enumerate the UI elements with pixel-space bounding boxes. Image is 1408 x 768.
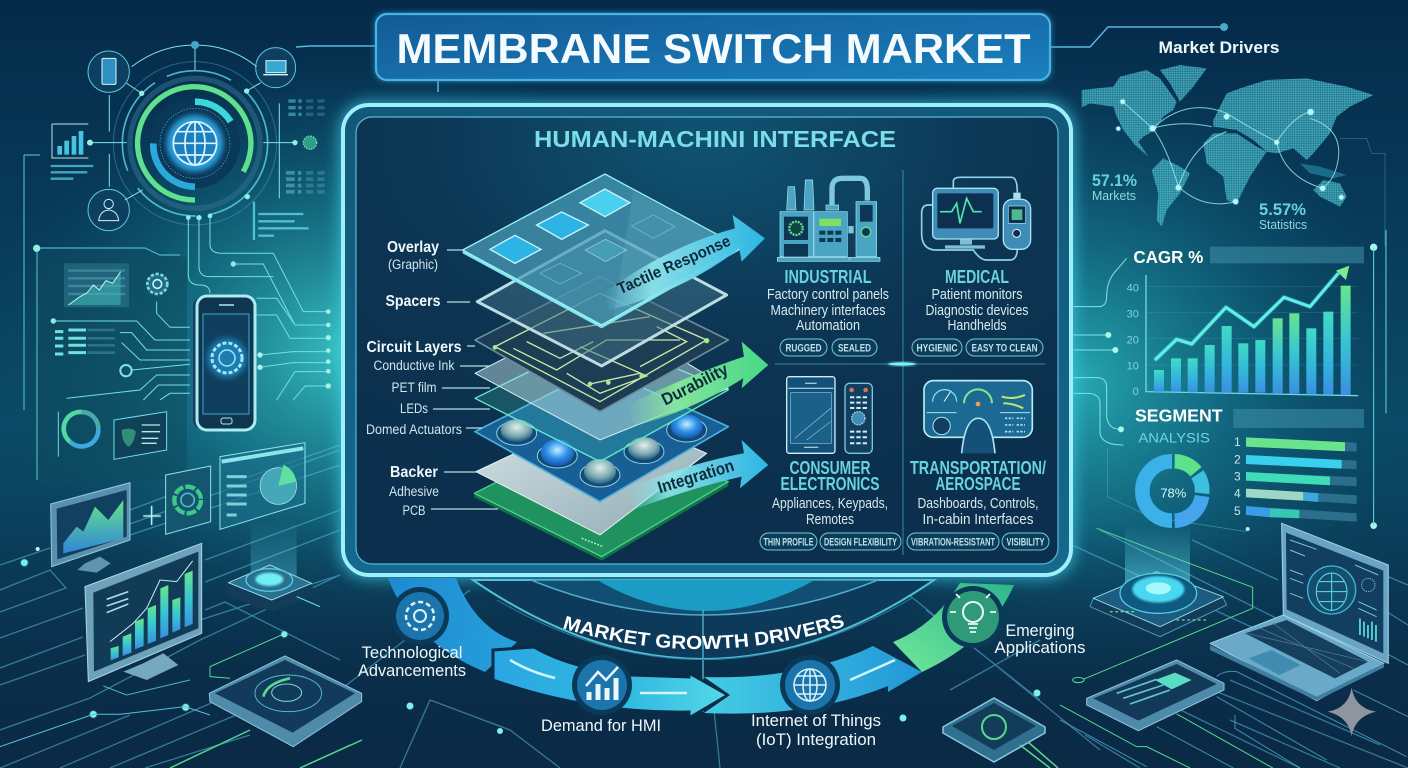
text: internet of things: Internet of Things — [751, 711, 881, 730]
icon: factory — [777, 178, 880, 261]
bar and line chart: 30 — [1127, 308, 1139, 320]
segment bars: 3 — [1234, 470, 1241, 484]
arrow band: IoT — [704, 646, 922, 714]
text: emerging applications — [994, 621, 1086, 657]
layer labels: PCB — [402, 503, 426, 518]
arrow band: technological advancements — [388, 578, 517, 672]
bar and line chart: 10 — [1127, 360, 1139, 372]
chips: industrial — [780, 339, 877, 356]
chips: industrial: RUGGED — [786, 342, 822, 354]
LED film layer — [475, 337, 728, 462]
layer labels: Backer — [390, 464, 438, 481]
text: transportation uses: Dashboards, Controls, — [918, 496, 1038, 512]
icon: trend chart — [572, 655, 632, 715]
monitor 2 — [85, 543, 202, 682]
text: consumer uses: Appliances, Keypads, — [772, 496, 888, 512]
icon: tablet and remote — [787, 377, 872, 453]
panel: CAGR and segment analysis: ANALYSIS — [1138, 429, 1210, 445]
label: market growth drivers: MARKET GROWTH DRIVERS — [563, 614, 844, 650]
chips: transportation: VIBRATION-RESISTANT — [911, 536, 995, 548]
spacer layer — [477, 231, 727, 366]
text: technological advancements: Advancements — [358, 661, 466, 680]
traces to phone — [53, 216, 328, 400]
stat: 57.1% — [1092, 171, 1137, 203]
text: medical uses: Handhelds — [948, 318, 1006, 334]
icon: light bulb — [942, 586, 1004, 648]
arrow labels — [615, 233, 736, 497]
hologram pedestal right — [1090, 525, 1227, 637]
text: consumer uses: Remotes — [806, 512, 854, 528]
segment bars: 5 — [1234, 504, 1241, 518]
panel: CAGR and segment analysis: 78% — [1160, 485, 1187, 500]
tablet — [209, 656, 362, 747]
arrow labels: Durability — [658, 360, 732, 409]
segment bars: 4 — [1234, 487, 1241, 501]
stat: 5.57% — [1259, 200, 1307, 232]
text: medical uses — [926, 287, 1028, 334]
chips: consumer: THIN PROFILE — [764, 536, 814, 548]
domed actuator layer — [475, 368, 728, 502]
text: emerging applications: Applications — [994, 638, 1086, 657]
chips: industrial: SEALED — [838, 342, 871, 354]
mini bar chart — [51, 124, 93, 179]
chips: consumer — [760, 533, 901, 550]
icon: globe — [780, 655, 840, 715]
monitor 1 — [51, 483, 130, 573]
donut chart 78% — [1142, 461, 1202, 521]
segment: transportation aerospace — [910, 381, 1046, 478]
lens under panel — [473, 580, 934, 712]
panel: left dashboard circuit board — [0, 41, 362, 747]
hub: globe with rings — [33, 41, 331, 400]
icon: gear — [391, 587, 449, 645]
icon: patient monitor — [922, 177, 1031, 260]
left lower screens — [0, 412, 362, 747]
chips: transportation: VISIBILITY — [1006, 536, 1045, 548]
arrow band: demand — [493, 647, 728, 718]
text: medical: MEDICAL — [945, 267, 1009, 287]
text: transportation uses: In-cabin Interfaces — [922, 512, 1034, 528]
panel: market drivers map — [1082, 38, 1385, 247]
text: industrial uses: Machinery interfaces — [770, 303, 886, 319]
text: aerospace: AEROSPACE — [936, 474, 1020, 494]
overlay layer — [463, 174, 740, 328]
segment: medical — [922, 177, 1031, 287]
small screen chart — [64, 263, 129, 307]
heading: segment analysis: SEGMENT — [1135, 406, 1223, 426]
text: emerging applications: Emerging — [1006, 621, 1074, 640]
layer labels: Domed Actuators — [366, 422, 462, 437]
market growth drivers arc — [358, 578, 1086, 768]
icon: smartphone — [192, 296, 255, 430]
text: electronics: ELECTRONICS — [780, 474, 880, 494]
text: transportation uses — [918, 496, 1038, 528]
layer labels: LEDs — [400, 401, 428, 416]
panel heading: HUMAN-MACHINI INTERFACE — [534, 126, 896, 152]
target tile — [166, 466, 211, 534]
chips: transportation — [907, 533, 1049, 550]
PCB layer — [474, 427, 728, 561]
layer stack exploded diagram — [463, 174, 768, 561]
chips: medical: HYGIENIC — [916, 342, 958, 354]
heading: market drivers: Market Drivers — [1158, 38, 1280, 57]
holo chart panel — [220, 443, 305, 529]
text: industrial uses: Factory control panels — [767, 287, 889, 303]
layer labels: Circuit Layers — [366, 339, 462, 356]
panel: main Human-Machine Interface — [340, 102, 1074, 578]
heading: CAGR %: CAGR % — [1133, 247, 1203, 267]
segment bars — [1234, 435, 1357, 522]
layer labels: Adhesive — [389, 484, 439, 499]
title banner: MEMBRANE SWITCH MARKET — [396, 25, 1031, 72]
text: consumer uses — [772, 496, 888, 528]
arrow: durability — [627, 342, 768, 427]
text: demand for HMI: Demand for HMI — [541, 716, 661, 735]
arrow: integration — [627, 440, 768, 510]
bar and line chart — [1127, 266, 1358, 398]
layer labels — [366, 239, 498, 518]
text: industrial uses — [767, 287, 889, 334]
text: industrial: INDUSTRIAL — [784, 267, 872, 287]
chips: medical: EASY TO CLEAN — [972, 342, 1038, 354]
layer labels: (Graphic) — [388, 257, 438, 272]
chips: consumer: DESIGN FLEXIBILITY — [824, 536, 897, 548]
text: medical uses: Patient monitors — [932, 287, 1022, 303]
circuit layer — [475, 277, 728, 412]
icon: vehicle dashboard — [924, 381, 1032, 453]
backer adhesive layer — [476, 410, 707, 535]
segment: consumer electronics — [787, 377, 872, 478]
layer labels: PET film — [392, 380, 436, 395]
arrow band: emerging — [893, 583, 1014, 672]
world map — [1082, 65, 1385, 247]
phone on desk — [1087, 660, 1224, 731]
stat: 5.57%: Statistics — [1259, 217, 1307, 232]
laptop — [1210, 523, 1388, 701]
layer labels: Spacers — [386, 293, 440, 310]
segment: industrial — [777, 178, 880, 287]
icon: circuit chip — [943, 698, 1058, 768]
stat: 5.57%: 5.57% — [1259, 200, 1306, 219]
bar and line chart: 0 — [1133, 386, 1139, 398]
layer labels: Overlay — [387, 239, 439, 256]
text: technological advancements — [358, 643, 466, 680]
text: technological advancements: Technological — [362, 643, 462, 662]
text: transportation: TRANSPORTATION/ — [910, 458, 1046, 478]
arrow labels: Integration — [655, 456, 736, 497]
stat: 57.1%: 57.1% — [1092, 171, 1137, 190]
watermark sparkle — [1328, 688, 1376, 736]
title banner — [296, 12, 1228, 92]
hologram pedestal — [227, 520, 320, 612]
arrow labels: Tactile Response — [615, 233, 733, 298]
text: internet of things — [751, 711, 881, 749]
panel: CAGR and segment analysis — [1073, 230, 1386, 532]
text: consumer electronics: CONSUMER — [790, 458, 870, 478]
text: internet of things: (IoT) Integration — [756, 730, 876, 749]
arrow: tactile response — [603, 215, 765, 310]
bar and line chart: 20 — [1127, 334, 1139, 346]
segment bars: 1 — [1234, 435, 1241, 449]
text: medical uses: Diagnostic devices — [926, 303, 1028, 319]
segment bars: 2 — [1234, 452, 1241, 466]
text: industrial uses: Automation — [796, 318, 860, 334]
chips: medical — [912, 339, 1043, 356]
PET film layer — [475, 310, 728, 440]
stat: 57.1%: Markets — [1092, 188, 1136, 203]
layer labels: Conductive Ink — [374, 358, 455, 373]
bar and line chart: 40 — [1127, 282, 1139, 294]
panel: right bottom devices — [1060, 523, 1408, 768]
